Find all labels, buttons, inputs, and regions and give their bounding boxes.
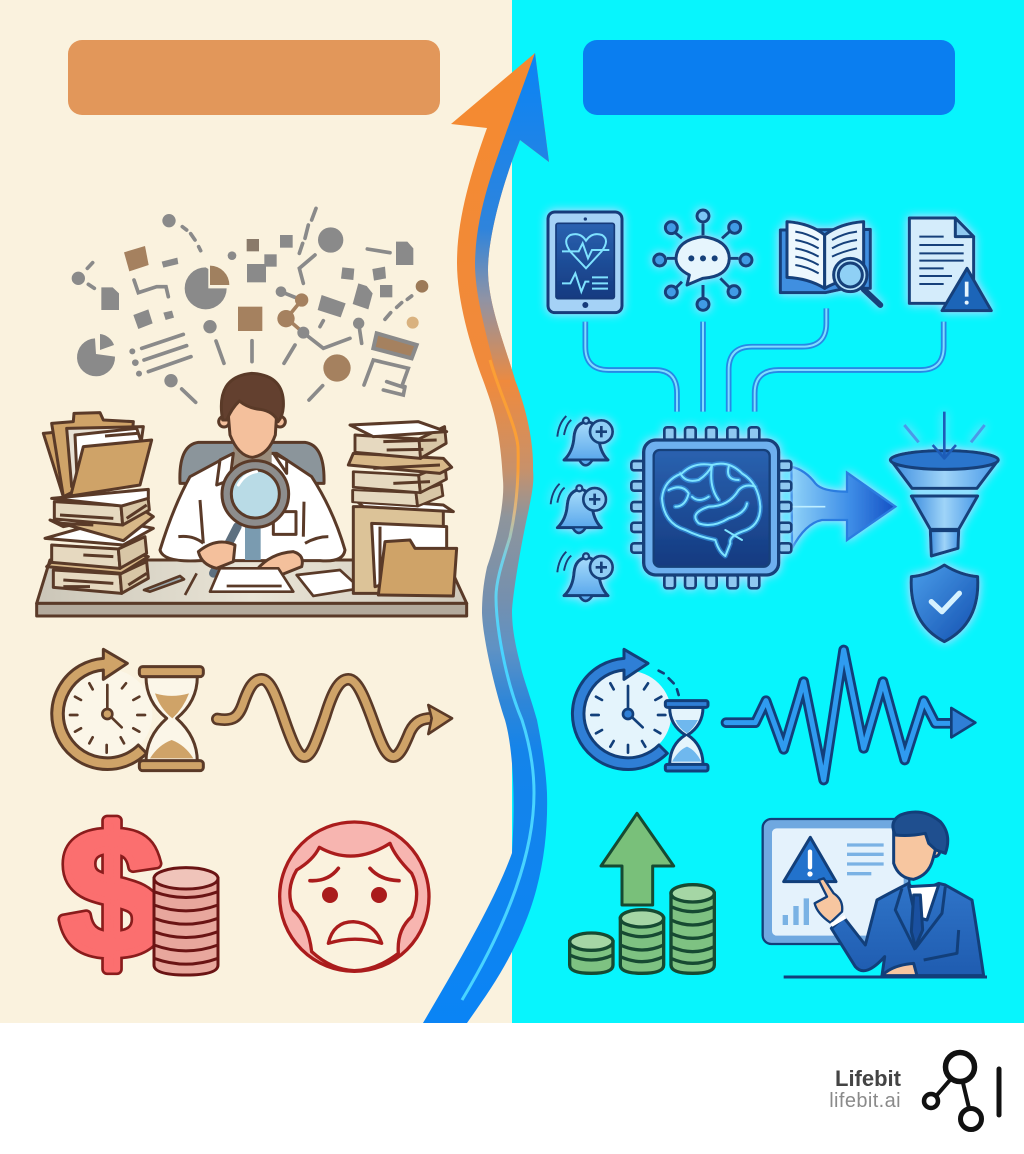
icon: filter funnel — [890, 412, 998, 556]
icon: small hourglass — [665, 701, 708, 771]
icon: worried face — [280, 822, 429, 971]
footer: white strip — [0, 1023, 1024, 1154]
icon: speech bubble network — [654, 210, 752, 310]
icon: AI chip with brain — [631, 427, 791, 588]
icon: output arrow from chip — [790, 467, 895, 548]
bottom-right icons — [570, 649, 987, 977]
icon: clock with looping arrow — [52, 649, 152, 770]
desk — [37, 560, 467, 616]
presentation screen with alert — [763, 819, 909, 944]
transition arrow: rising ribbon from orange to blue — [423, 53, 549, 1023]
scattered data fragments — [72, 208, 428, 402]
presenter in blue suit pointing at alert — [784, 812, 987, 977]
background: right cyan panel — [512, 0, 1024, 1023]
icon: dollar sign: $ — [61, 791, 162, 995]
icon: slow wavy arrow — [217, 679, 452, 757]
icon: document with warning triangle — [909, 218, 991, 311]
researcher with magnifying glass — [160, 373, 345, 577]
icon: hourglass — [139, 667, 203, 771]
icon: dollar sign: $ — [61, 791, 162, 995]
logo mark: connected nodes — [924, 1052, 999, 1130]
logo text: lifebit.ai: lifebit.ai — [829, 1090, 901, 1112]
icon: green coin stacks — [570, 885, 714, 973]
icon: shield with check — [911, 565, 978, 642]
icon: growth arrow — [601, 813, 674, 905]
icon: notification bells — [551, 416, 613, 601]
right illustration: AI pipeline — [548, 210, 998, 642]
connector lines from sources to AI chip — [585, 308, 944, 412]
heading banner: blue, right — [583, 40, 955, 115]
papers and pen on desk — [144, 568, 360, 596]
icon: coin stack — [154, 868, 218, 975]
left illustration: scattered data and researcher at desk — [37, 208, 467, 616]
heading banner: orange, left — [68, 40, 440, 115]
icon: fast clock with looping arrow — [572, 649, 679, 770]
right stack of books with folder — [348, 422, 457, 596]
bottom-left icons — [52, 649, 452, 995]
icon: open book with magnifier — [780, 222, 880, 305]
icon: tablet with heart monitor — [548, 212, 622, 313]
icon: fast zigzag arrow — [726, 650, 975, 780]
left stack of books with folder — [43, 413, 153, 593]
logo text: Lifebit: Lifebit — [835, 1066, 902, 1091]
background: left cream panel — [0, 0, 512, 1023]
